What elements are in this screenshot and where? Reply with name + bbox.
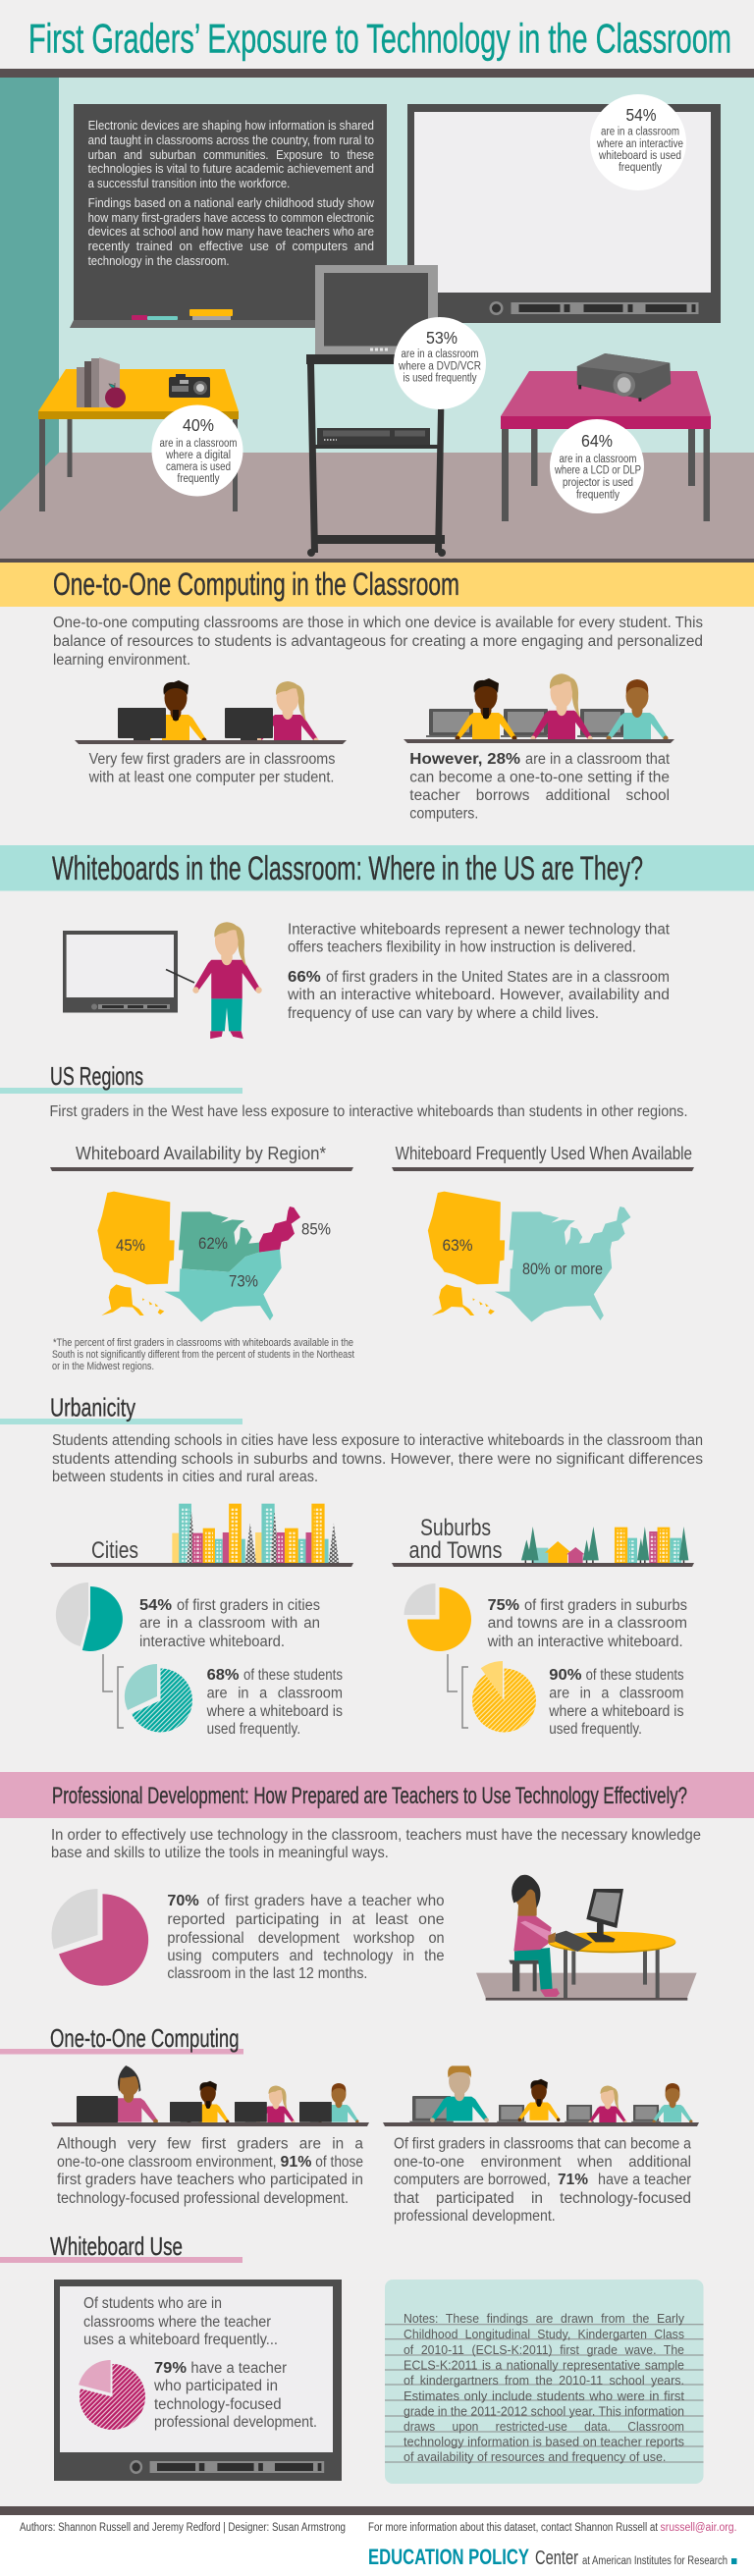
footer: Authors: Shannon Russell and Jeremy Redford | Designer: Susan Armstrong <box>20 2522 346 2534</box>
footer <box>0 2506 754 2576</box>
text: cities 68% <box>206 1667 343 1738</box>
text: 91%: of those <box>315 2154 363 2171</box>
panel: whiteboard use: uses a whiteboard frequently... <box>83 2332 278 2348</box>
illustration: Cities skyline: Cities <box>91 1537 138 1564</box>
map: frequent use <box>428 1192 630 1322</box>
panel: classroom scene <box>0 69 754 563</box>
illustration: Cities skyline <box>50 1504 353 1567</box>
panel: notes: Estimates only include students who were in first <box>404 2388 684 2403</box>
callout: 64% projector: projector is used <box>563 477 633 489</box>
callout: 54% whiteboard: are in a classroom <box>601 126 679 137</box>
subheading: US Regions <box>0 1061 242 1094</box>
subheading: One-to-One Computing: One-to-One Computing <box>50 2023 240 2053</box>
callout: 54% whiteboard: whiteboard is used <box>598 150 681 162</box>
text: one-to-one intro <box>53 615 703 669</box>
text: 91%: 91% <box>281 2154 312 2171</box>
panel: whiteboard use: Of students who are in <box>83 2295 222 2312</box>
callout: 53% DVD: are in a classroom <box>401 349 479 360</box>
text: 71% <box>394 2136 691 2225</box>
text: PD intro <box>51 1827 701 1861</box>
pie: cities 54% <box>56 1583 123 1651</box>
chalkboard: a successful transition into the workforce. <box>88 177 290 190</box>
text: cities 68%: are in a classroom <box>207 1686 343 1702</box>
caption: 28%: can become a one-to-one setting if the <box>409 770 670 785</box>
text: cities 68%: used frequently. <box>207 1721 300 1738</box>
panel: notes: ECLS-K:2011 is a nationally representative sample <box>404 2358 684 2372</box>
footer: EDUCATION POLICY <box>368 2545 529 2569</box>
text: 71%: have a teacher <box>598 2172 691 2188</box>
pie: PD 70% <box>52 1889 148 1986</box>
text: cities 54%: are in a classroom with an <box>139 1615 320 1632</box>
footer: For more information about this dataset, contact Shannon Russell at <box>368 2522 659 2534</box>
caption: 28% <box>409 751 671 823</box>
text: suburbs 90%: used frequently. <box>549 1721 642 1738</box>
caption: 28%: teacher borrows additional school <box>409 787 670 804</box>
text: 91%: technology-focused professional development. <box>57 2190 349 2207</box>
text: PD 70%: reported participating in at least one <box>167 1911 445 1928</box>
panel: notes: of availability of resources and frequency of use. <box>404 2449 666 2464</box>
panel: whiteboard use: technology-focused <box>154 2396 281 2413</box>
callout: 40% camera: are in a classroom <box>159 438 238 450</box>
illustration: teacher at computer <box>476 1875 697 2001</box>
text: suburbs 90%: of these students <box>586 1667 684 1684</box>
text: cities 68%: where a whiteboard is <box>206 1703 343 1720</box>
illustration: teacher and students with desktops <box>51 2066 369 2126</box>
map: availability by region: 73% <box>229 1273 258 1291</box>
text: PD 70%: using computers and technology in the <box>167 1948 445 1964</box>
callout: 40% camera: 40% <box>183 415 214 435</box>
text: cities 54%: interactive whiteboard. <box>139 1634 285 1650</box>
heading: frequently used: Whiteboard Frequently Used When Available <box>396 1144 692 1163</box>
illustration: two students at desktop computers <box>75 680 347 744</box>
connector: suburbs <box>448 1654 468 1728</box>
callout: 54% whiteboard: 54% <box>626 105 656 125</box>
text: PD 70%: 70% <box>167 1893 199 1909</box>
heading band: One-to-One Computing <box>0 563 754 607</box>
callout: 40% camera: where a digital <box>165 450 231 461</box>
callout: 40% camera <box>151 404 243 497</box>
callout: 53% DVD <box>394 317 486 409</box>
pie: suburbs 90% <box>472 1661 536 1732</box>
chalkboard: how many first-graders have access to common electronic <box>88 211 374 225</box>
map: availability by region <box>97 1192 331 1322</box>
heading band: Professional Development <box>0 1772 754 1818</box>
text: suburbs 75%: and towns are in a classroom <box>488 1615 687 1632</box>
callout: 64% projector: frequently <box>576 489 619 501</box>
map: frequent use: 80% or more <box>522 1261 603 1278</box>
chalkboard: recently trained on effective use of computers and <box>88 240 374 253</box>
heading band: One-to-One Computing: One-to-One Computing in the Classroom <box>53 566 459 602</box>
panel: whiteboard use: classrooms where the teacher <box>83 2314 271 2331</box>
heading: frequently used <box>392 1144 694 1171</box>
text: regions: First graders in the West have less exposure to interactive whiteboards than students in other regions. <box>49 1103 687 1120</box>
chalkboard: and taught in classrooms across the country, from rural to <box>88 134 374 147</box>
panel: notes: draws upon restricted-use data. Classroom <box>404 2419 684 2434</box>
illustration: teacher at whiteboard <box>63 922 262 1039</box>
text: cities 68%: 68% <box>207 1667 240 1684</box>
heading: availability: Whiteboard Availability by Region* <box>76 1144 326 1163</box>
text: cities 54%: 54% <box>139 1597 172 1614</box>
footer: srussell@air.org. <box>660 2522 736 2534</box>
callout: 64% projector: 64% <box>581 431 613 451</box>
pie: cities 68% <box>125 1664 192 1732</box>
caption: very few: Very few first graders are in classrooms <box>89 751 336 768</box>
text: one-to-one intro: balance of resources to students is advantageous for creating a more engaging and personalized <box>53 633 703 650</box>
panel: whiteboard use: 79% <box>154 2360 187 2377</box>
illustration: Suburbs and Towns: Suburbs <box>420 1515 491 1541</box>
callout: 64% projector: where a LCD or DLP <box>554 465 641 477</box>
text: PD 70%: of first graders have a teacher who <box>207 1893 445 1909</box>
callout: 54% whiteboard: where an interactive <box>596 138 683 150</box>
caption: 28%: However, 28% <box>409 751 520 768</box>
text: suburbs 75%: of first graders in suburbs <box>524 1597 687 1614</box>
text: suburbs 90%: 90% <box>549 1667 582 1684</box>
text: PD 70%: classroom in the last 12 months. <box>167 1965 367 1982</box>
callout: 53% DVD: where a DVD/VCR <box>398 361 481 373</box>
footnote: South is not significantly different from the percent of students in the Northeast <box>52 1349 354 1361</box>
text: urbanicity: between students in cities and rural areas. <box>52 1469 318 1485</box>
text: suburbs 90% <box>548 1667 684 1738</box>
text: PD 70% <box>167 1893 445 1982</box>
footer: Center <box>535 2548 578 2569</box>
interactive whiteboard <box>407 104 721 323</box>
text: 91% <box>57 2136 363 2207</box>
panel: notes: grade in the 2011-2012 school year. This information <box>404 2403 684 2419</box>
illustration: teacher and students with laptops <box>383 2066 699 2126</box>
chalkboard: Electronic devices are shaping how information is shared <box>88 119 374 133</box>
caption: 28%: are in a classroom that <box>525 751 671 768</box>
illustration: Suburbs and Towns: and Towns <box>408 1537 503 1564</box>
chalkboard: technology in the classroom. <box>88 254 230 268</box>
chalkboard <box>70 104 387 328</box>
callout: 40% camera: camera is used <box>166 461 231 473</box>
subheading: One-to-One Computing <box>0 2023 243 2054</box>
text: cities 54% <box>139 1597 320 1650</box>
subheading: US Regions: US Regions <box>50 1061 143 1091</box>
callout: 54% whiteboard <box>590 94 686 190</box>
text: PD intro: base and skills to utilize the tools in meaningful ways. <box>51 1845 389 1861</box>
caption: very few: with at least one computer per student. <box>88 770 334 785</box>
callout: 54% whiteboard: frequently <box>619 162 662 174</box>
subheading: Whiteboard Use: Whiteboard Use <box>50 2231 183 2261</box>
map: availability by region: 45% <box>116 1237 145 1255</box>
map: availability by region: 85% <box>301 1221 331 1239</box>
text: urbanicity <box>52 1432 703 1485</box>
callout: 64% projector: are in a classroom <box>560 454 636 465</box>
text: 71%: one-to-one environment when additional <box>394 2154 691 2171</box>
panel: notes: Notes: These findings are drawn from the Early <box>404 2311 684 2326</box>
caption: 28%: computers. <box>409 806 478 823</box>
pie: 79% <box>79 2360 145 2430</box>
text: suburbs 90%: where a whiteboard is <box>548 1703 684 1720</box>
map: availability by region: 62% <box>198 1235 228 1253</box>
text: urbanicity: Students attending schools in cities have less exposure to interactive whiteboards in the classroom than <box>52 1432 703 1449</box>
chalkboard: technologies is vital to future academic achievement and <box>88 162 374 176</box>
text: one-to-one intro: One-to-one computing classrooms are those in which one device is available for every student. This <box>53 615 703 631</box>
text: whiteboard intro: offers teachers flexibility in how instruction is delivered. <box>288 939 636 956</box>
text: suburbs 75%: 75% <box>488 1597 519 1614</box>
footnote: *The percent of first graders in classrooms with whiteboards available in the <box>53 1337 353 1349</box>
panel: whiteboard use: professional development. <box>154 2414 317 2431</box>
subheading: Urbanicity <box>0 1393 242 1424</box>
panel: whiteboard use: have a teacher <box>190 2360 287 2377</box>
TV cart <box>306 265 446 557</box>
illustration: three students at laptops <box>404 673 674 743</box>
text: whiteboard intro: with an interactive whiteboard. However, availability and <box>287 987 670 1003</box>
subheading: Urbanicity: Urbanicity <box>50 1393 135 1422</box>
text: 71%: computers are borrowed, <box>394 2172 551 2188</box>
callout: 53% DVD: is used frequently <box>403 373 477 385</box>
map: frequent use: 63% <box>442 1237 473 1255</box>
panel: notes: technology information is based on teacher reports <box>404 2435 684 2448</box>
text: cities 68%: of these students <box>243 1667 343 1684</box>
callout: 53% DVD: 53% <box>426 328 458 348</box>
text: one-to-one intro: learning environment. <box>53 652 190 669</box>
text: 91%: Although very few first graders are in a <box>57 2136 363 2153</box>
text: 71%: professional development. <box>394 2208 556 2225</box>
panel: notes: Childhood Longitudinal Study, Kindergarten Class <box>404 2327 684 2341</box>
callout: 40% camera: frequently <box>177 473 220 485</box>
callout: 64% projector <box>550 419 644 513</box>
text: urbanicity: students attending schools in suburbs and towns. However, there were no significant differences <box>52 1451 703 1468</box>
text: 71%: 71% <box>558 2172 588 2188</box>
chalkboard: urban and suburban communities. Exposure to these <box>88 148 374 162</box>
footnote: or in the Midwest regions. <box>52 1361 154 1372</box>
pie: suburbs 75% <box>404 1583 471 1651</box>
text: whiteboard intro: 66% <box>288 969 321 986</box>
panel: whiteboard use: who participated in <box>153 2378 278 2394</box>
right table with projector <box>501 353 711 521</box>
footer: at American Institutes for Research <box>582 2555 727 2567</box>
left table with books, apple, camera <box>38 357 239 511</box>
panel: whiteboard use <box>54 2280 342 2481</box>
text: PD 70%: professional development workshop on <box>167 1930 445 1947</box>
chalkboard: devices at school and how many have teachers who are <box>88 225 374 239</box>
heading: availability <box>50 1144 353 1171</box>
footnote <box>52 1337 354 1372</box>
text: whiteboard intro: frequency of use can vary by where a child lives. <box>288 1005 599 1022</box>
text: whiteboard intro: Interactive whiteboards represent a newer technology that <box>288 921 671 938</box>
panel: notes: of 2010-11 (ECLS-K:2011) first grade wave. The <box>404 2342 684 2357</box>
text: 91%: first graders have teachers who participated in <box>57 2172 363 2188</box>
text: whiteboard intro <box>287 921 671 1022</box>
caption: very few <box>88 751 336 785</box>
panel: notes <box>385 2280 703 2484</box>
text: suburbs 75%: with an interactive whiteboard. <box>487 1634 683 1650</box>
text: suburbs 90%: are in a classroom <box>549 1686 683 1702</box>
chalkboard: Findings based on a national early childhood study show <box>88 196 375 210</box>
text: cities 54%: of first graders in cities <box>177 1597 320 1614</box>
connector: cities <box>103 1654 124 1728</box>
illustration: Suburbs and Towns <box>392 1515 694 1567</box>
text: 71%: Of first graders in classrooms that can become a <box>394 2136 691 2153</box>
panel: notes: of kindergartners from the 2010-11 school years. <box>404 2373 684 2388</box>
text: 71%: that participated in technology-focused <box>394 2190 691 2207</box>
text: PD intro: In order to effectively use technology in the classroom, teachers must have the necessary knowledge <box>51 1827 701 1844</box>
text: suburbs 75% <box>487 1597 687 1650</box>
text: whiteboard intro: of first graders in the United States are in a classroom <box>326 969 670 986</box>
text: 91%: one-to-one classroom environment, <box>57 2154 277 2171</box>
